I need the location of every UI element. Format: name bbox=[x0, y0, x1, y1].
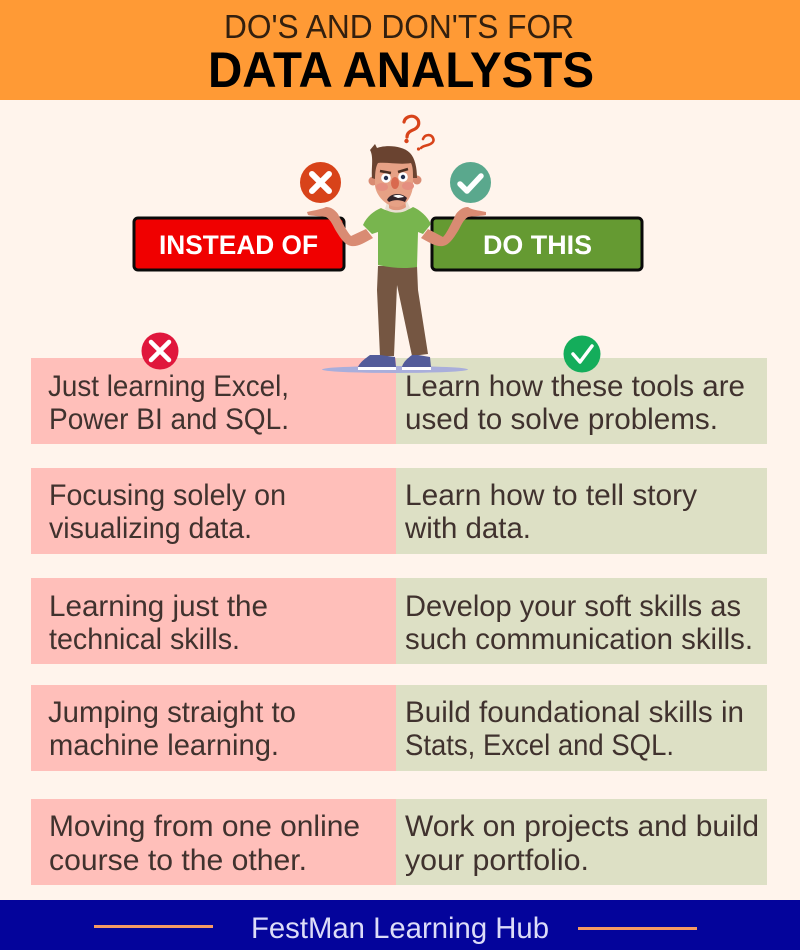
row 3: such communication skills. bbox=[405, 623, 753, 656]
title line 1: DO'S AND DON'TS FOR bbox=[224, 8, 574, 45]
row 5: your portfolio. bbox=[405, 844, 589, 877]
do this button: DO THIS bbox=[483, 230, 592, 260]
eyes bbox=[381, 173, 391, 183]
ground shadow bbox=[322, 366, 468, 373]
icon: question marks bbox=[404, 116, 434, 151]
trousers bbox=[377, 266, 428, 356]
row 4: Build foundational skills in bbox=[405, 696, 744, 729]
row 2 bbox=[31, 468, 767, 554]
icon: red cross above column bbox=[142, 332, 178, 370]
neck and collar bbox=[385, 199, 410, 213]
shirt bbox=[363, 207, 431, 268]
title line 2: DATA ANALYSTS bbox=[208, 42, 594, 98]
mouth bbox=[387, 194, 407, 202]
row 5 bbox=[31, 799, 767, 885]
row 1: Learn how these tools are bbox=[405, 370, 745, 403]
row 4: Jumping straight to bbox=[48, 696, 296, 729]
icon: orange cross above hand bbox=[300, 162, 341, 203]
head bbox=[375, 158, 413, 207]
row 4: machine learning. bbox=[49, 729, 279, 762]
header band bbox=[0, 0, 800, 100]
row 2: with data. bbox=[404, 512, 531, 545]
ears bbox=[368, 176, 378, 186]
footer divider right bbox=[578, 927, 697, 930]
row 5: Work on projects and build bbox=[405, 810, 759, 843]
row 2: visualizing data. bbox=[49, 512, 252, 545]
row 1 bbox=[31, 358, 767, 444]
instead of button: INSTEAD OF bbox=[159, 230, 318, 260]
row 2: Focusing solely on bbox=[49, 479, 286, 512]
instead of button bbox=[134, 218, 344, 270]
left arm bbox=[307, 207, 373, 246]
icon: green check above column bbox=[564, 336, 600, 372]
right arm bbox=[421, 207, 486, 246]
row 3: technical skills. bbox=[49, 623, 240, 656]
row 1: Power BI and SQL. bbox=[49, 403, 289, 436]
row 4: Stats, Excel and SQL. bbox=[405, 729, 674, 762]
row 3: Develop your soft skills as bbox=[405, 590, 741, 623]
row 5: Moving from one online bbox=[49, 810, 360, 843]
row 3: Learning just the bbox=[49, 590, 268, 623]
row 1: Just learning Excel, bbox=[48, 370, 289, 403]
do this button bbox=[432, 218, 642, 270]
illustration: confused man bbox=[307, 144, 486, 373]
row 3 bbox=[31, 578, 767, 664]
hair bbox=[370, 144, 417, 179]
footer band bbox=[0, 900, 800, 950]
nose bbox=[391, 177, 399, 189]
row 1: used to solve problems. bbox=[405, 403, 718, 436]
row 2: Learn how to tell story bbox=[405, 479, 697, 512]
panel: comparison rows bbox=[31, 358, 767, 885]
footer divider left bbox=[94, 925, 213, 928]
row 5: course to the other. bbox=[49, 844, 307, 877]
icon: teal check above hand bbox=[450, 162, 491, 203]
row 4 bbox=[31, 685, 767, 771]
shoes bbox=[358, 355, 396, 367]
cheeks bbox=[376, 183, 388, 191]
footer text: FestMan Learning Hub bbox=[251, 912, 549, 945]
